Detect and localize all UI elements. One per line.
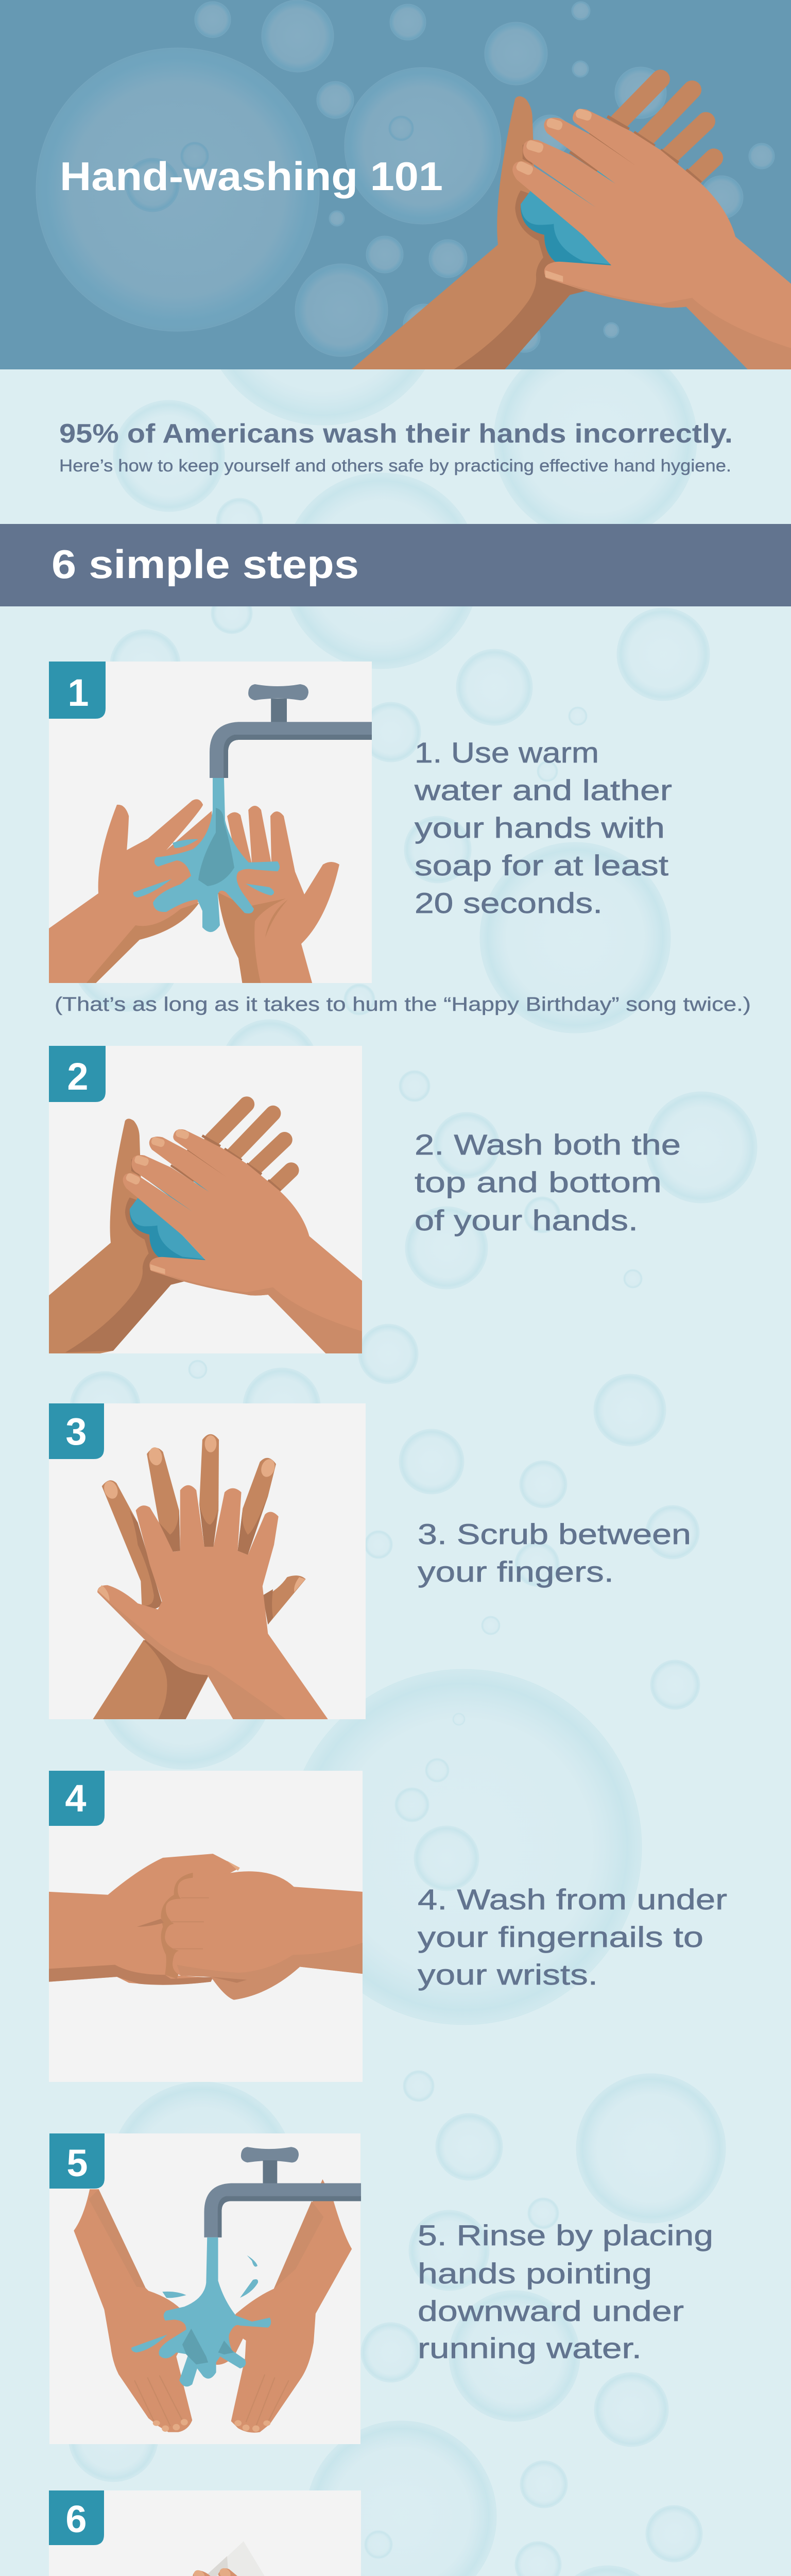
section band: 6 simple steps: [0, 524, 791, 606]
step 5 text: hands pointing: [418, 2257, 652, 2290]
step 2 text: of your hands.: [415, 1204, 638, 1236]
step 2 text: [415, 1128, 681, 1236]
step 3 text: [418, 1518, 691, 1588]
panel: step 4 illustration: [49, 1771, 363, 2082]
section band: 6 simple steps: 6 simple steps: [51, 541, 359, 587]
step 5 text: downward under: [418, 2295, 684, 2327]
step number badge: [49, 662, 106, 719]
step 1 text: water and lather: [414, 774, 672, 806]
step number badge: [49, 2490, 104, 2545]
illustration: hands washing with soap: [351, 70, 791, 369]
water splash: [131, 2238, 271, 2386]
step number badge: 6: [65, 2498, 87, 2540]
towel: [124, 2541, 324, 2576]
step number badge: 2: [67, 1055, 89, 1098]
step 1 text: 20 seconds.: [415, 887, 603, 919]
icon: faucet: [204, 2147, 361, 2238]
step 2 text: 2. Wash both the: [415, 1128, 681, 1161]
water splash: [133, 778, 280, 932]
step number badge: [49, 1403, 104, 1459]
step 3 text: 3. Scrub between: [418, 1518, 691, 1550]
step 1 text: your hands with: [415, 811, 665, 844]
right hand: [165, 1871, 363, 2000]
step 1 text: soap for at least: [415, 849, 669, 882]
front hand: [167, 2566, 367, 2576]
hero bubbles: [36, 0, 775, 357]
intro subhead: Here’s how to keep yourself and others safe by practicing effective hand hygiene.: [59, 456, 731, 475]
left hand: [49, 799, 214, 985]
back hand: [92, 1434, 306, 1720]
step 4 text: your wrists.: [418, 1958, 598, 1991]
left hand: [49, 1854, 240, 1985]
right hand: [214, 2179, 352, 2433]
step 4 text: [418, 1883, 727, 1991]
step 2 text: top and bottom: [415, 1166, 662, 1198]
intro headline: 95% of Americans wash their hands incorrectly.: [59, 419, 733, 449]
title: Hand-washing 101: [60, 154, 443, 199]
panel: step 3 illustration: [49, 1403, 366, 1720]
icon: faucet: [210, 684, 372, 778]
panel: step 5 illustration: [49, 2133, 361, 2444]
step number badge: [49, 2133, 105, 2189]
step 1 text: [414, 736, 672, 919]
step 5 text: [418, 2219, 713, 2364]
step number badge: 5: [66, 2142, 88, 2184]
right hand: [218, 806, 339, 985]
step number badge: [49, 1771, 105, 1826]
front hand: [97, 1485, 329, 1720]
step number badge: 3: [65, 1410, 87, 1453]
panel: step 2 illustration: [49, 1046, 362, 1353]
hero panel: [0, 0, 791, 369]
step 4 text: 4. Wash from under: [418, 1883, 727, 1916]
step 3 text: your fingers.: [418, 1555, 614, 1588]
left hand: [74, 2189, 192, 2432]
step number badge: 4: [65, 1777, 87, 1820]
step number badge: [49, 1046, 106, 1102]
panel: step 6 illustration: [49, 2490, 367, 2576]
step 5 text: 5. Rinse by placing: [418, 2219, 713, 2251]
step 4 text: your fingernails to: [418, 1921, 703, 1953]
step 1 note: (That’s as long as it takes to hum the “Happy Birthday” song twice.): [55, 994, 751, 1015]
step number badge: 1: [67, 671, 89, 714]
step 1 text: 1. Use warm: [415, 736, 599, 769]
panel: step 1 illustration: [49, 662, 372, 985]
step 5 text: running water.: [418, 2332, 642, 2364]
